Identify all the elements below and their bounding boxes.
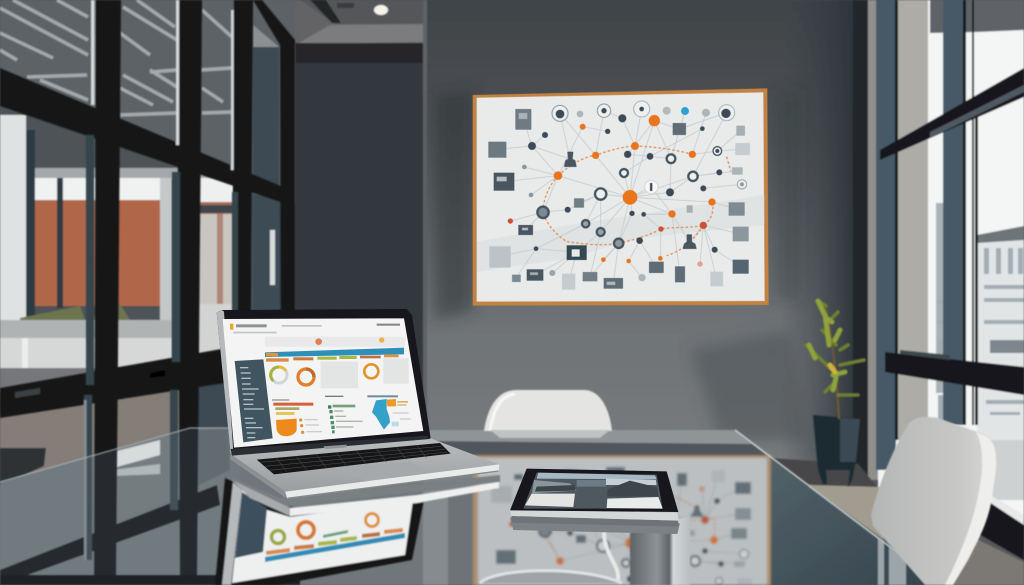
reflected lid edge xyxy=(222,482,242,585)
laptop lid xyxy=(217,309,431,454)
tablet xyxy=(509,469,680,534)
dashboard donut charts xyxy=(271,364,378,385)
table edge xyxy=(0,428,938,583)
window mullions, left xyxy=(0,0,300,585)
dashboard table cells xyxy=(321,358,409,388)
soft wall shadows xyxy=(435,90,810,440)
stem and leaves xyxy=(806,301,864,418)
interior view through middle panes xyxy=(0,105,283,420)
lower transom xyxy=(0,336,295,418)
reflected tabs xyxy=(266,528,403,555)
right chair xyxy=(871,417,996,585)
laptop screen xyxy=(223,318,423,448)
back chair xyxy=(484,390,612,438)
trackpad xyxy=(331,462,430,482)
dark desk seen outside xyxy=(0,448,46,486)
keyboard xyxy=(257,443,451,474)
reflected base xyxy=(228,475,500,508)
right side table tint xyxy=(770,458,940,585)
laptop xyxy=(217,309,499,499)
right window wall xyxy=(770,0,1024,585)
dashboard bar widgets xyxy=(272,399,322,436)
pot xyxy=(813,415,860,487)
tablet edge xyxy=(509,509,679,521)
dashboard map widget xyxy=(367,395,411,430)
tablet reflection xyxy=(510,517,680,534)
tablet body xyxy=(510,469,678,512)
dashboard category tabs xyxy=(266,355,399,362)
wall poster: network diagram xyxy=(473,88,769,306)
chair reflection arc xyxy=(480,571,622,583)
laptop reflection in table xyxy=(215,475,500,585)
dashboard blue banner xyxy=(265,348,404,357)
laptop front edge xyxy=(285,464,499,499)
upper transom xyxy=(0,68,295,207)
table level transom xyxy=(0,485,220,585)
building outside xyxy=(936,226,1024,500)
dashboard list widget xyxy=(325,396,363,433)
lower sill and floor xyxy=(983,492,1024,525)
ceiling xyxy=(250,0,424,45)
wall reflection bands xyxy=(300,430,752,444)
glass table surface xyxy=(0,428,940,585)
upper panes with ceiling seen through xyxy=(0,0,295,205)
dashboard header xyxy=(230,324,405,347)
table column reflection xyxy=(480,516,690,585)
dashboard sidebar xyxy=(235,359,273,442)
lower panes with floor seen through xyxy=(0,365,295,585)
potted plant xyxy=(806,301,864,487)
glass veil over frames below the table edge xyxy=(0,428,240,585)
ceiling stripes reflected in upper panes xyxy=(0,0,232,115)
reflected screen xyxy=(232,490,413,583)
tablet screen xyxy=(523,473,663,509)
poster reflection in table xyxy=(473,455,771,585)
left window wall xyxy=(0,0,295,585)
laptop hinge and deck xyxy=(231,438,499,492)
main wall xyxy=(423,0,858,470)
far right upper pane xyxy=(253,25,279,190)
dark back wall xyxy=(295,43,423,435)
